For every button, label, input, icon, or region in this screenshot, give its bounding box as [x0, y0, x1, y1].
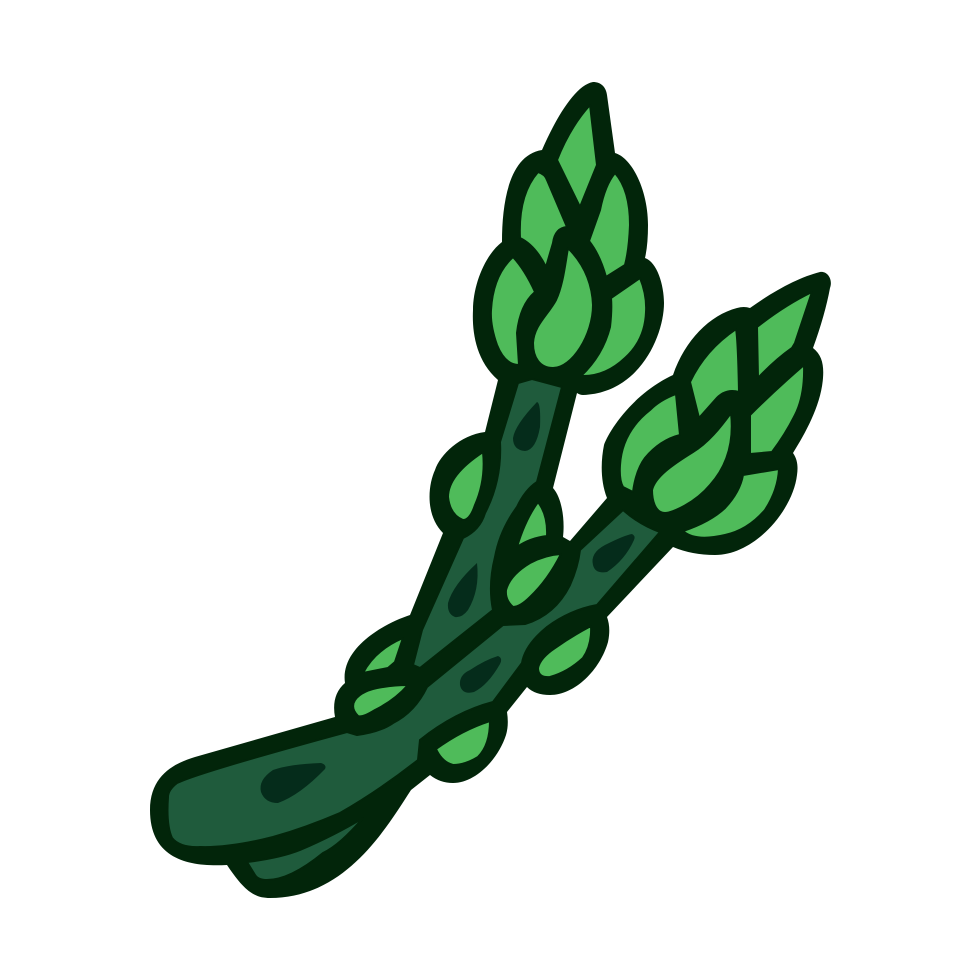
small leaf 4 — [363, 638, 403, 673]
stem spots — [260, 402, 635, 803]
dark outline silhouette — [150, 82, 831, 898]
small leaf 2 — [517, 502, 547, 547]
small leaf 7 — [436, 721, 490, 765]
small leaf 3 — [506, 554, 561, 607]
small leaf 6 — [538, 626, 591, 677]
stems — [168, 379, 660, 880]
bud leaves and small leaves — [353, 105, 812, 765]
bud 1 leaves — [557, 105, 597, 207]
stem: upper branch — [413, 379, 562, 668]
stem: main branch — [168, 510, 660, 847]
stem: lower branch — [247, 818, 363, 880]
small leaf 1 — [448, 452, 484, 520]
small leaf 5 — [353, 685, 408, 716]
bud 2 leaves — [757, 292, 812, 378]
